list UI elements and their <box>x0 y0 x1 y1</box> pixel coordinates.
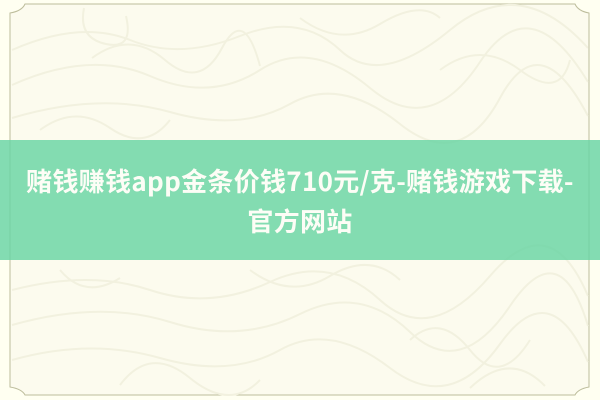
title <box>26 162 574 239</box>
title: 官方网站 <box>247 202 353 239</box>
green title band <box>0 140 600 260</box>
title: 赌钱赚钱app金条价钱710元/克-赌钱游戏下载- <box>26 162 574 199</box>
